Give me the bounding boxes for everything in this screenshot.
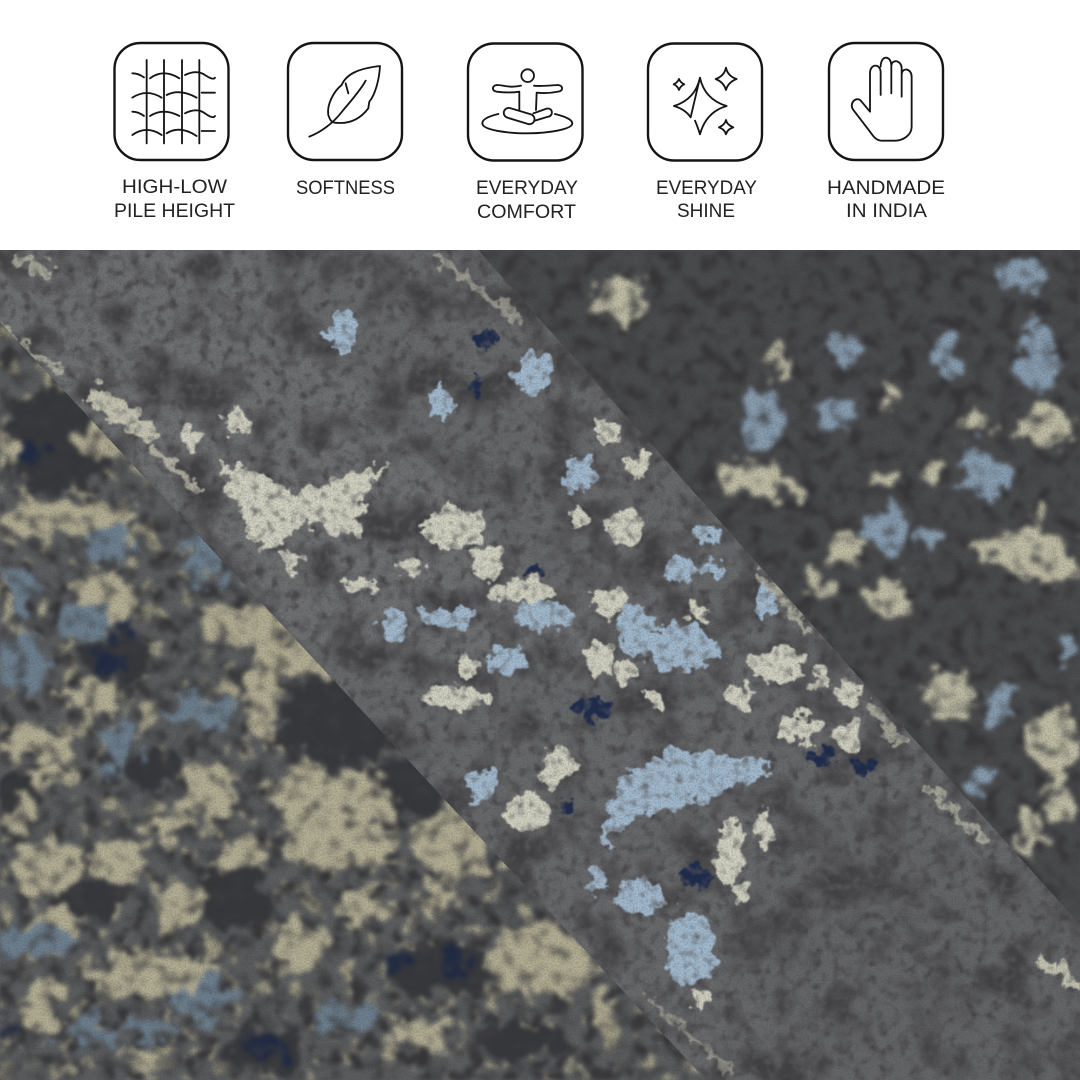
soft texture over flat rug	[0, 250, 1080, 1080]
rug background: flat rug out of focus	[0, 250, 1080, 1080]
icon: pile weave	[114, 43, 228, 160]
dark mottling on roll	[0, 250, 1080, 1080]
label: handmade in india: IN INDIA	[846, 201, 927, 222]
label: everyday comfort: EVERYDAY	[476, 178, 578, 199]
feature: handmade in india	[827, 43, 945, 222]
label: everyday shine: EVERYDAY	[656, 178, 757, 199]
cream splashes on roll	[182, 409, 864, 1010]
label: high-low pile height: HIGH-LOW	[122, 177, 227, 198]
blue-gray patches upper right	[741, 258, 1073, 797]
icon: open hand	[829, 43, 943, 160]
navy flecks on roll	[468, 330, 873, 888]
feature icon row	[114, 43, 945, 223]
icon: meditating figure	[468, 44, 582, 160]
label: everyday shine: SHINE	[677, 201, 735, 222]
feature: everyday shine	[648, 44, 762, 222]
feature: everyday comfort	[468, 44, 582, 223]
rug pile grain texture	[0, 250, 1080, 1080]
rolled rug band	[0, 250, 1080, 1080]
label: everyday shine	[656, 178, 757, 222]
icon: sparkles	[648, 44, 762, 160]
dark mottling on flat rug	[0, 250, 1080, 1080]
label: everyday comfort	[476, 178, 578, 223]
dark patches	[0, 390, 570, 1075]
label: handmade in india: HANDMADE	[827, 178, 945, 199]
cream patches upper right	[597, 274, 1080, 850]
tan flecks on flat rug	[0, 325, 701, 1080]
label: handmade in india	[827, 178, 945, 222]
label: softness: SOFTNESS	[296, 178, 395, 199]
tan patches lower left	[0, 420, 614, 1074]
navy specks lower left	[0, 446, 476, 1064]
icon: feather	[288, 43, 402, 160]
rug edge cream fringe	[2, 258, 1078, 1070]
photo: rolled rug close-up	[0, 250, 1080, 1080]
label: high-low pile height	[114, 177, 235, 222]
feature: high-low pile height	[114, 43, 235, 222]
label: everyday comfort: COMFORT	[477, 202, 576, 223]
feature: softness	[288, 43, 402, 199]
light blue splashes on roll	[328, 311, 780, 986]
blue-gray patches lower left	[0, 525, 377, 1042]
soft pile texture on roll	[0, 250, 1080, 1080]
label: high-low pile height: PILE HEIGHT	[114, 201, 235, 222]
